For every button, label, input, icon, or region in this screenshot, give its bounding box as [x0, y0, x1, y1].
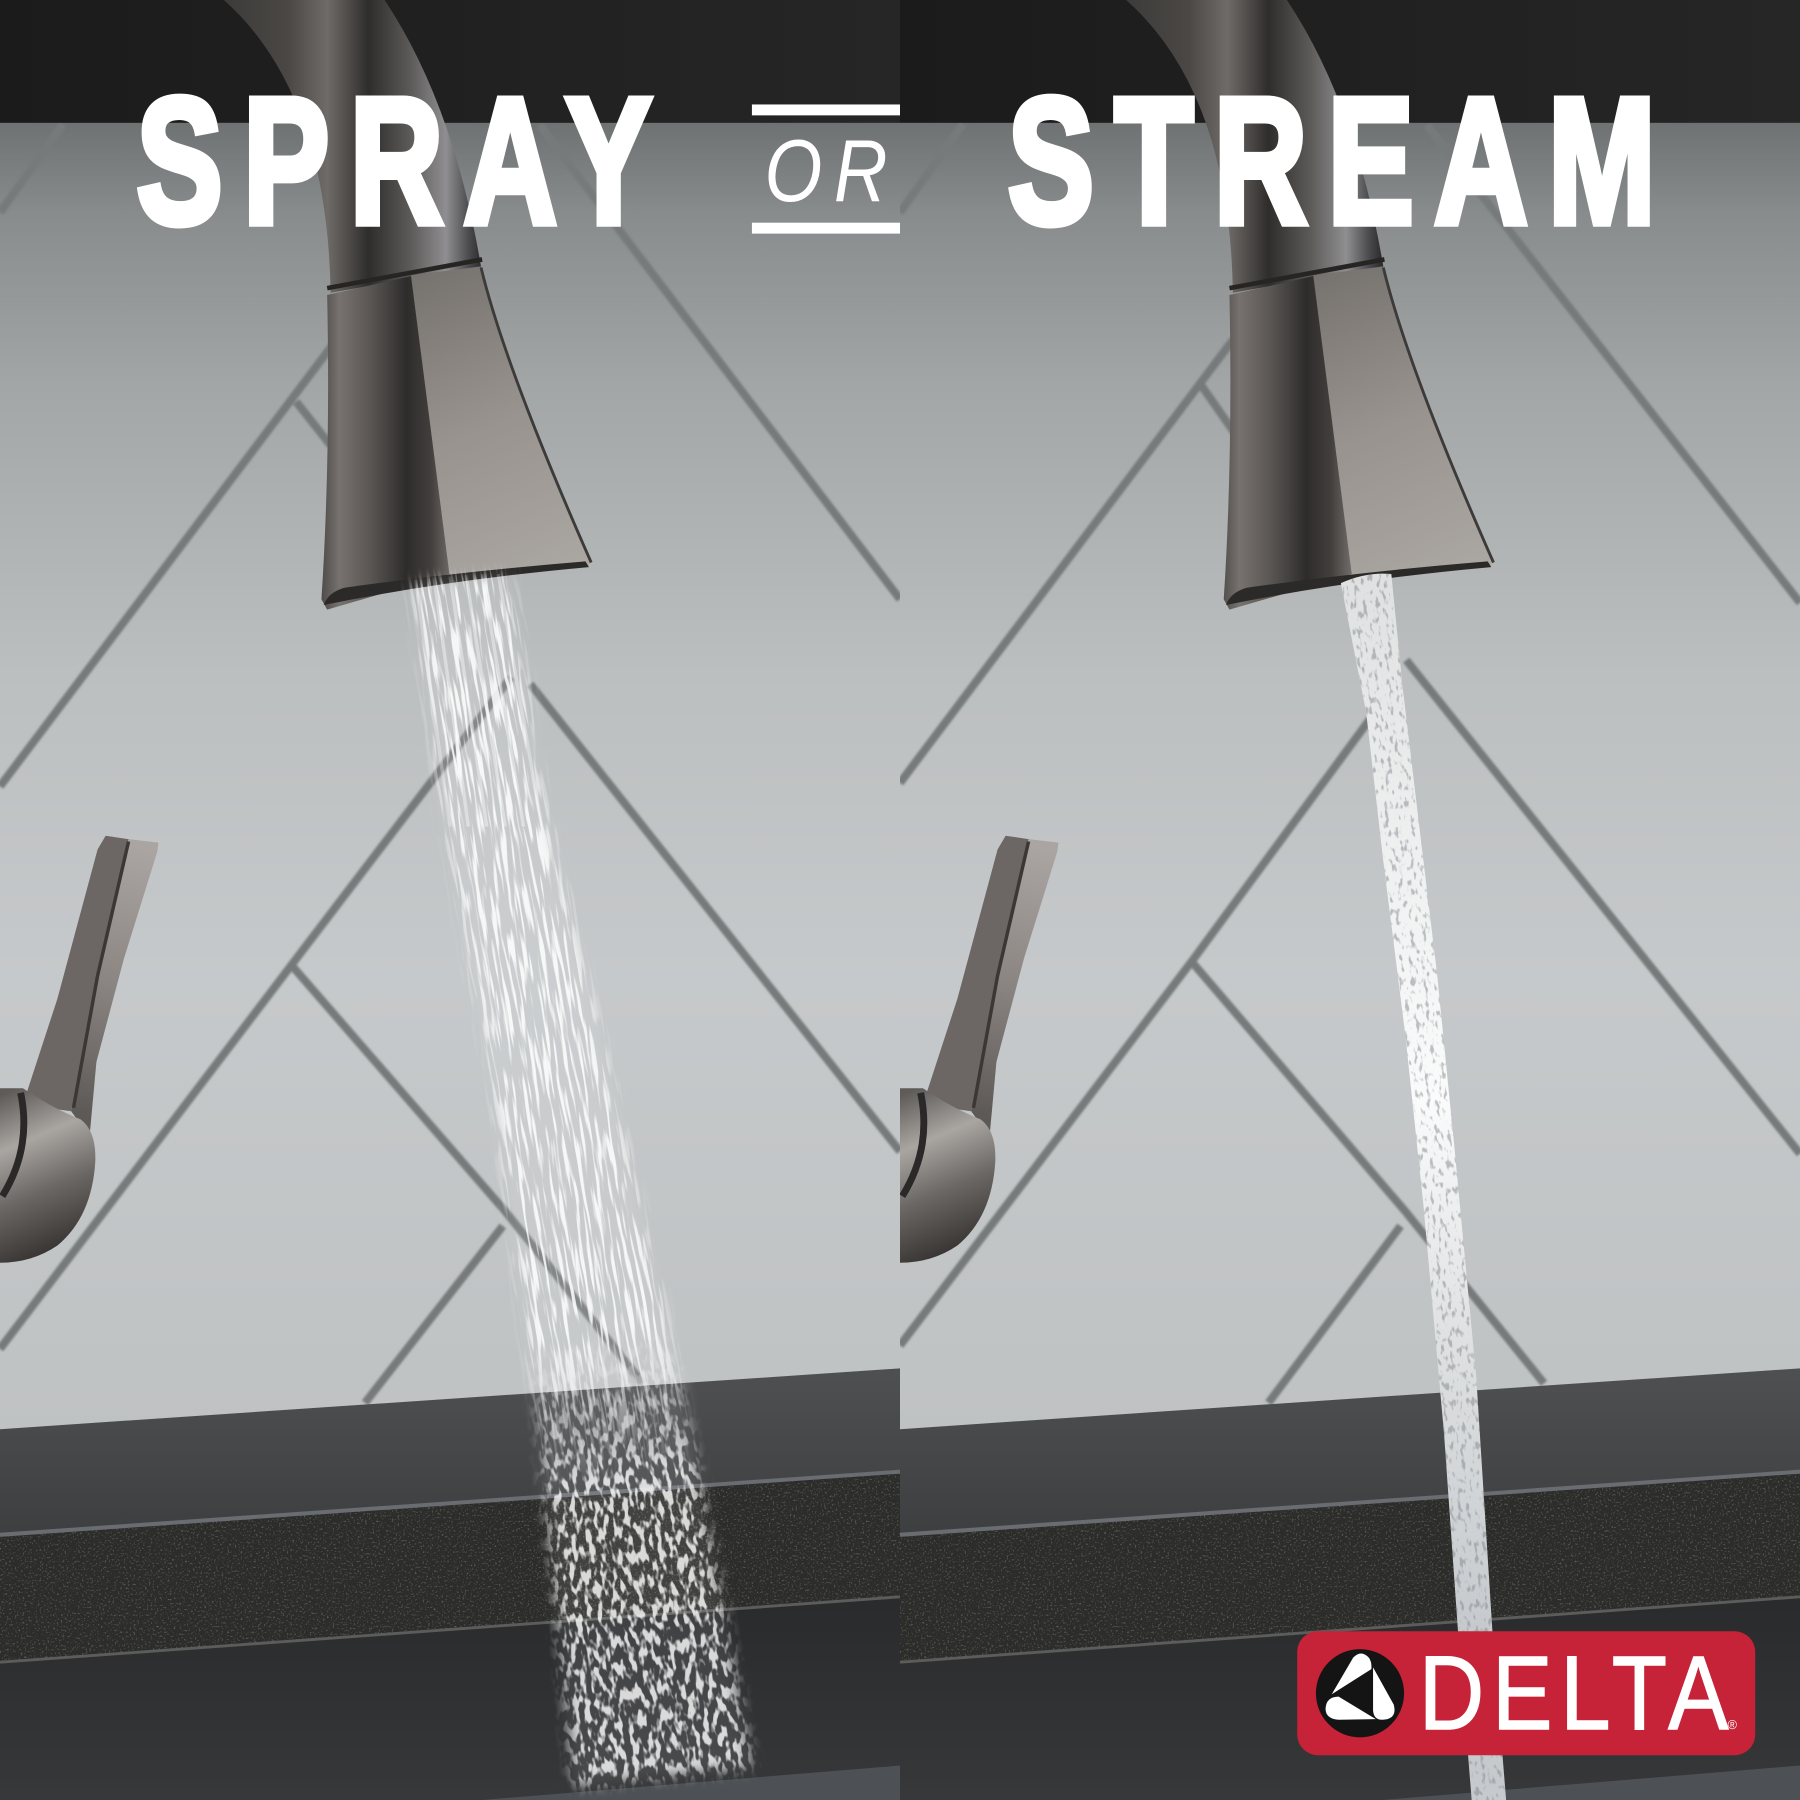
faucet lever — [900, 836, 1058, 1263]
granite counter edge — [900, 1474, 1800, 1662]
counter top — [900, 1368, 1800, 1536]
dark top band — [900, 114, 1800, 123]
heading: stream: STREAM — [1008, 62, 1676, 262]
sink rim line — [0, 1597, 900, 1662]
Delta logo badge — [1297, 1631, 1755, 1755]
granite counter edge — [0, 1474, 900, 1662]
counter edge highlight — [900, 1472, 1800, 1535]
spray head — [1224, 259, 1493, 610]
panel: spray photo — [0, 0, 904, 1800]
tile backsplash — [900, 115, 1800, 1446]
lever body — [0, 1088, 95, 1263]
dark top band — [0, 114, 900, 123]
counter edge highlight — [0, 1472, 900, 1535]
counter top — [0, 1368, 900, 1536]
spray head — [321, 259, 591, 610]
granite texture — [900, 1474, 1800, 1662]
spray water — [402, 567, 759, 1796]
sink basin — [0, 1598, 900, 1800]
registered mark: ® — [1728, 1718, 1738, 1732]
sink basin — [900, 1598, 1800, 1800]
Delta wordmark: DELTA — [1419, 1633, 1736, 1751]
granite texture — [0, 1474, 900, 1662]
sink lower surface — [1382, 1766, 1800, 1800]
grout lines — [0, 124, 900, 1403]
or label: OR — [765, 122, 899, 220]
heading: spray: SPRAY — [137, 62, 672, 262]
icon: Delta triangle mark — [1316, 1649, 1404, 1737]
or divider — [752, 104, 900, 234]
sink rim line — [900, 1597, 1800, 1662]
faucet neck — [1126, 0, 1383, 293]
spray nozzle jets — [416, 574, 542, 827]
grout lines — [900, 124, 1800, 1403]
stream water — [1340, 574, 1506, 1800]
faucet neck — [224, 0, 481, 293]
tile backsplash — [0, 115, 900, 1446]
panel: stream photo — [900, 0, 1800, 1800]
sink lower surface — [482, 1766, 900, 1800]
lever body — [900, 1088, 995, 1263]
faucet lever — [0, 836, 158, 1263]
